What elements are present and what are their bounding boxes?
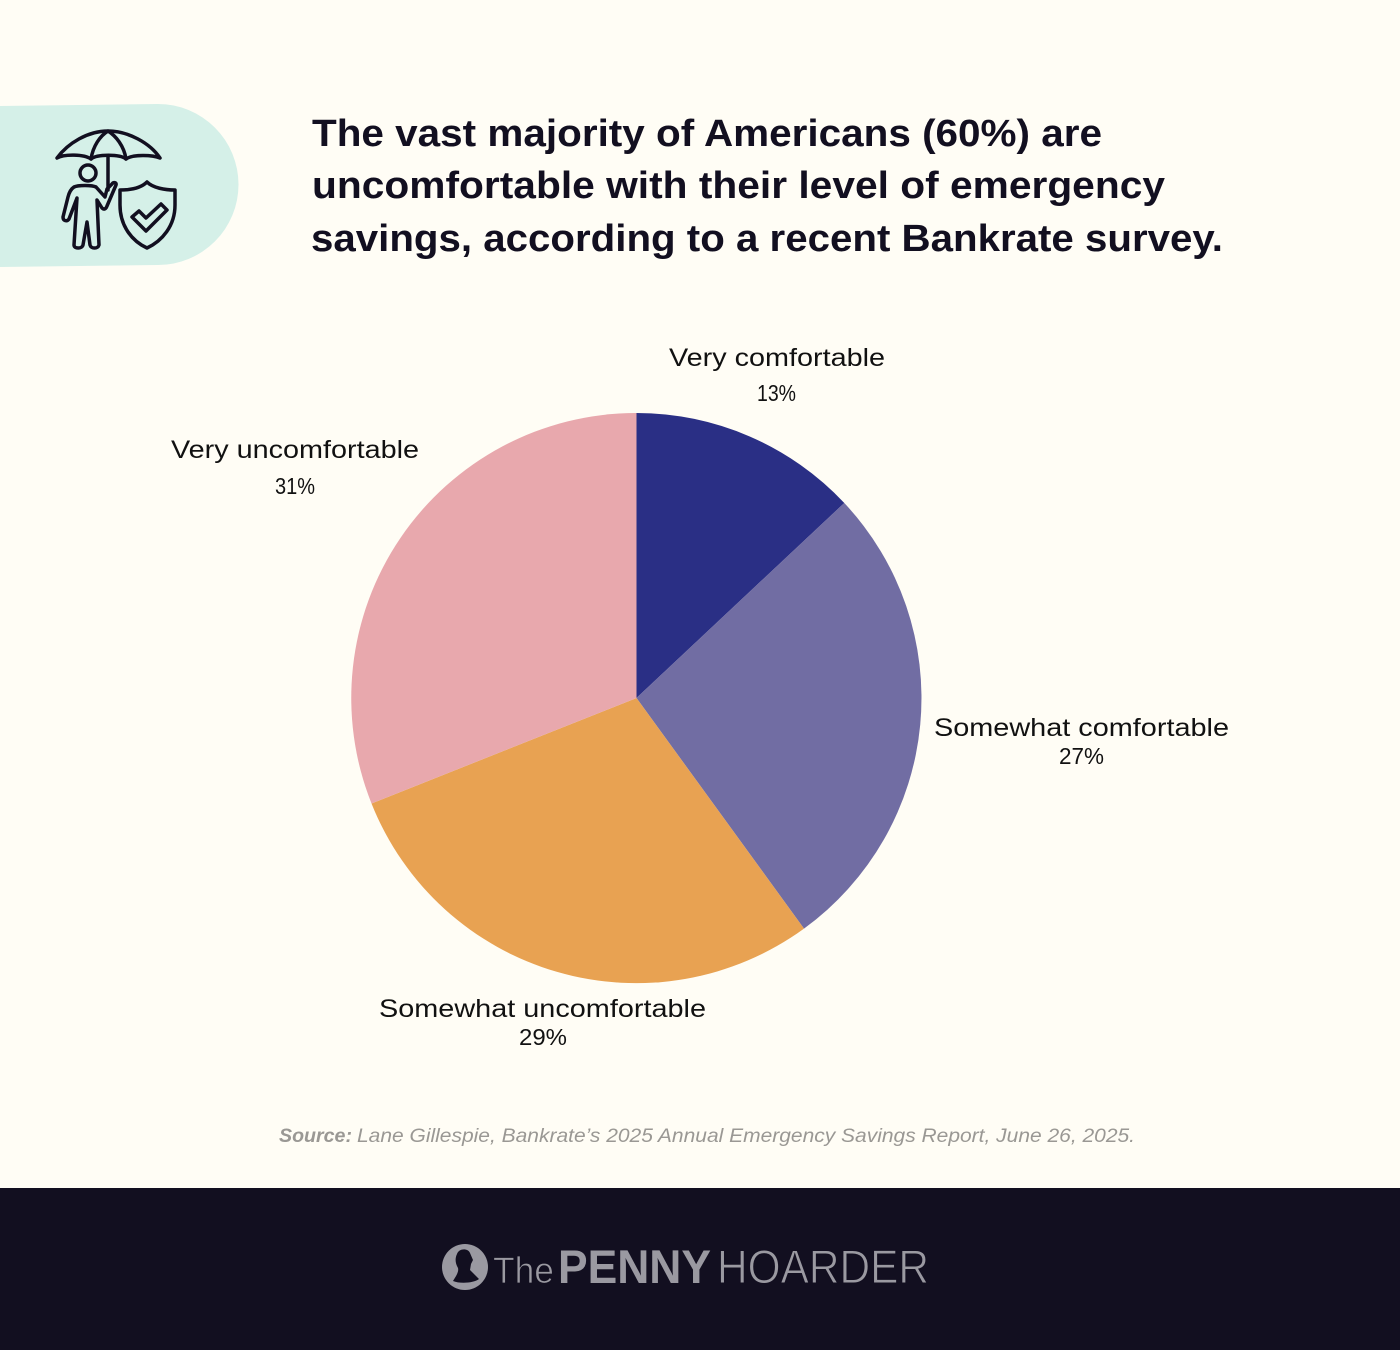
label: very comfortable: 13% bbox=[757, 380, 796, 406]
slice: somewhat comfortable 27% bbox=[636, 503, 921, 929]
icon badge: umbrella, person and shield bbox=[0, 104, 238, 267]
title: savings, according to a recent Bankrate survey. bbox=[311, 218, 1223, 260]
label: very uncomfortable: Very uncomfortable bbox=[171, 436, 419, 464]
source note: Lane Gillespie, Bankrate’s 2025 Annual Emergency Savings Report, June 26, 2025. bbox=[357, 1126, 1135, 1147]
label: somewhat uncomfortable: 29% bbox=[519, 1024, 567, 1050]
label: very comfortable: Very comfortable bbox=[669, 344, 885, 372]
label: somewhat uncomfortable: Somewhat uncomfortable bbox=[379, 995, 706, 1023]
pie chart bbox=[351, 413, 921, 983]
label: very uncomfortable: 31% bbox=[275, 473, 315, 499]
slice: very comfortable 13% bbox=[636, 413, 844, 698]
title bbox=[311, 113, 1223, 260]
footer logo: PENNY bbox=[558, 1240, 711, 1293]
source note: Source: bbox=[279, 1126, 352, 1147]
title: The vast majority of Americans (60%) are bbox=[312, 113, 1102, 155]
title: uncomfortable with their level of emergency bbox=[312, 165, 1165, 207]
slice: very uncomfortable 31% bbox=[351, 413, 636, 804]
label: very comfortable bbox=[669, 344, 885, 406]
label: somewhat uncomfortable bbox=[379, 995, 706, 1050]
icon: penny portrait bbox=[442, 1244, 488, 1290]
slice: somewhat uncomfortable 29% bbox=[372, 698, 804, 983]
label: somewhat comfortable: Somewhat comfortable bbox=[934, 714, 1229, 742]
label: somewhat comfortable bbox=[934, 714, 1229, 769]
label: somewhat comfortable: 27% bbox=[1059, 743, 1104, 769]
footer logo bbox=[442, 1240, 929, 1293]
label: very uncomfortable bbox=[171, 436, 419, 499]
footer band bbox=[0, 1188, 1400, 1350]
footer logo: The bbox=[493, 1250, 554, 1291]
footer logo: HOARDER bbox=[717, 1240, 929, 1293]
